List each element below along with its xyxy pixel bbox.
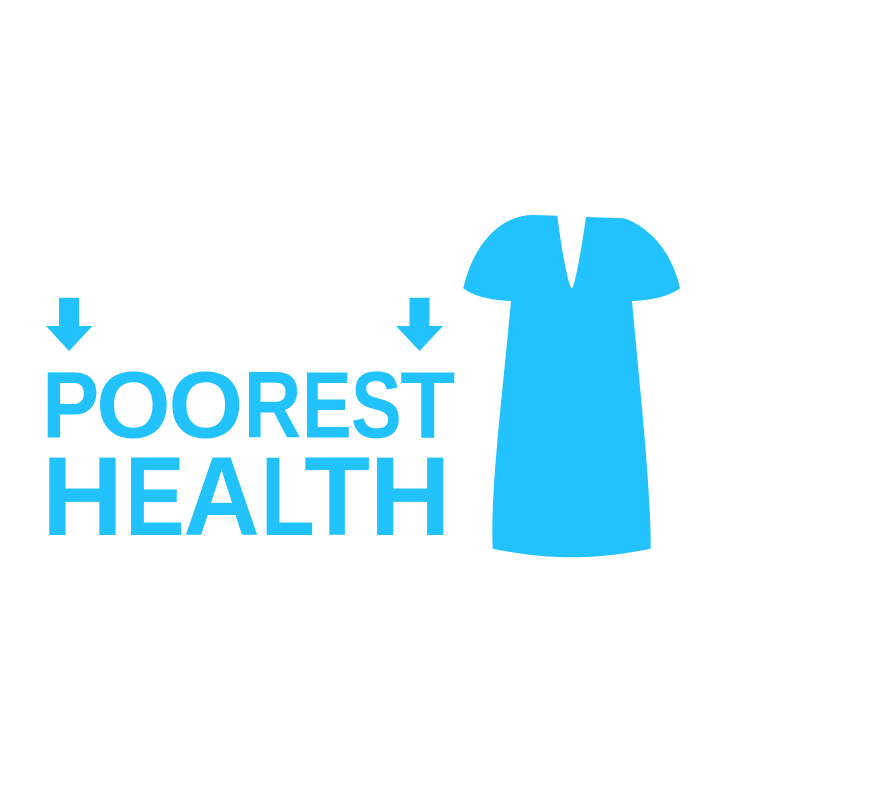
heading line: POOREST: P [42,352,99,458]
icon: dress [463,215,680,557]
heading line: HEALTH: L [261,434,315,559]
heading line: HEALTH: E [125,434,185,559]
heading line: HEALTH: H [42,434,123,559]
heading line: POOREST: S [351,352,402,458]
heading line: HEALTH: A [183,434,260,559]
icon: right down arrow [396,298,443,351]
heading line: POOREST: E [302,352,352,458]
heading line: POOREST: O [96,352,171,458]
heading: poorest health [42,352,455,559]
heading line: POOREST: R [244,352,302,458]
heading line: HEALTH: H [370,434,451,559]
icon: left down arrow [46,298,92,351]
heading line: POOREST: O [168,352,243,458]
heading line: POOREST: T [400,352,455,458]
heading line: HEALTH: T [304,434,370,559]
